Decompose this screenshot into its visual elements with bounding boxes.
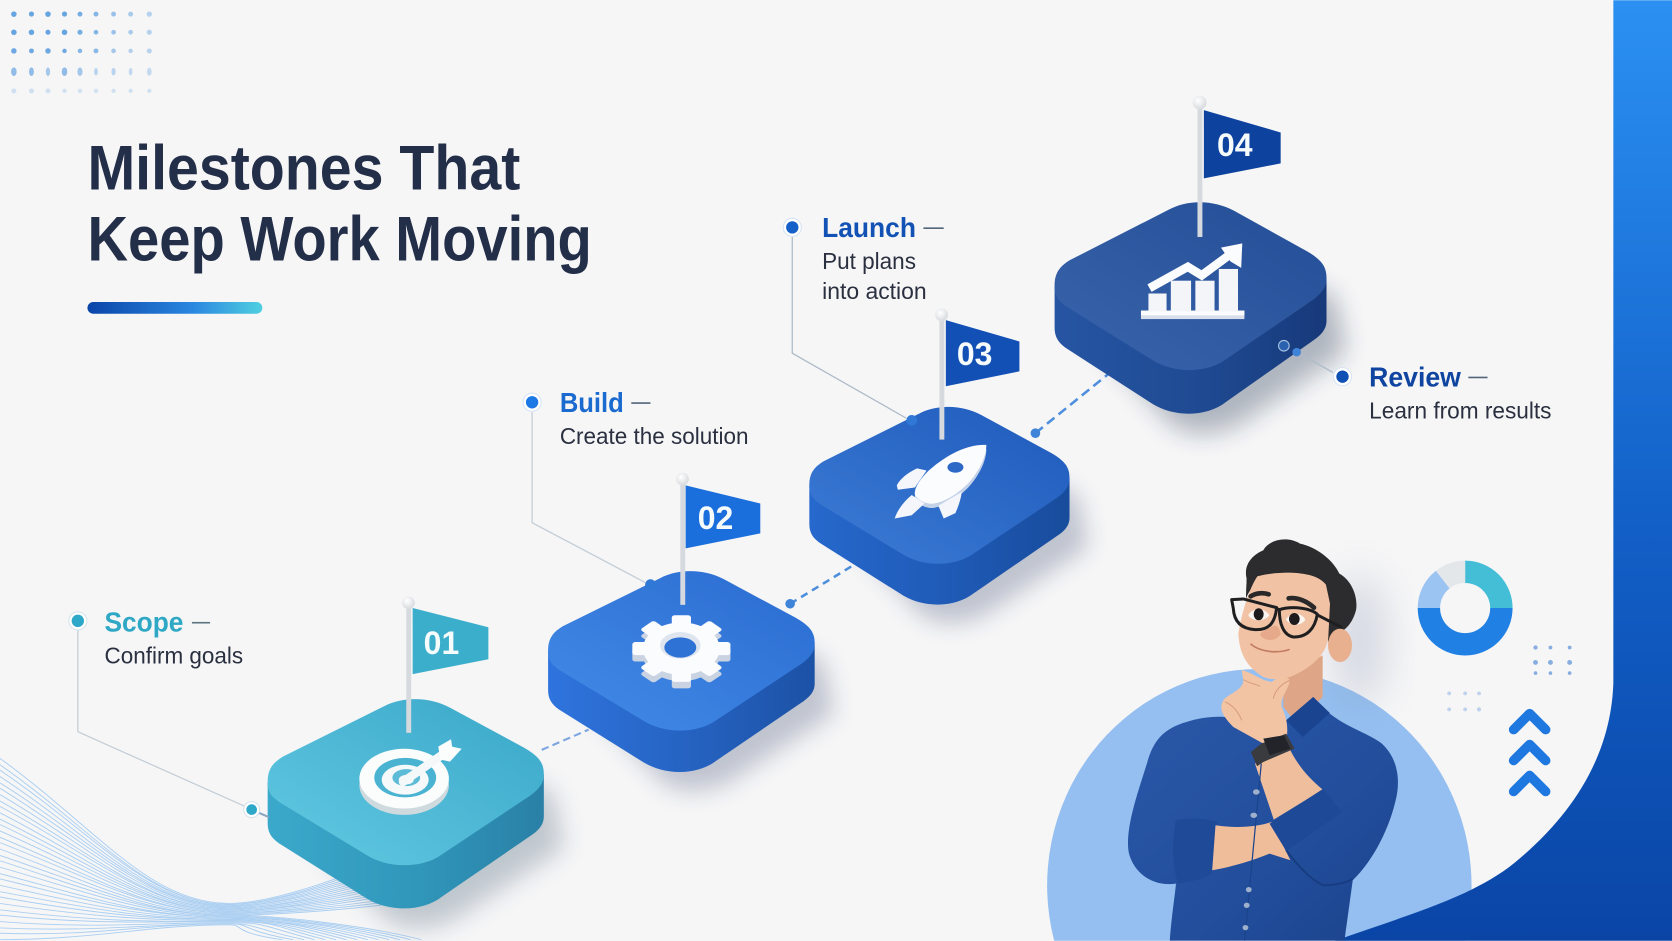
torso and arms bbox=[1128, 697, 1398, 941]
flag 02 bbox=[676, 473, 760, 605]
milestone block 2 bbox=[548, 571, 834, 791]
callout: Review: Learn from results bbox=[1369, 397, 1552, 423]
light blue circle behind person bbox=[1047, 669, 1472, 941]
icon: bar chart with rising arrow bbox=[1141, 243, 1244, 319]
left cuff bbox=[1173, 818, 1218, 884]
eyes bbox=[1254, 608, 1300, 625]
hand under chin bbox=[1221, 670, 1290, 744]
decorative dot grid top left bbox=[11, 11, 152, 93]
glasses bbox=[1232, 599, 1342, 637]
flag 04 bbox=[1193, 96, 1281, 237]
callout: Launch: Put plans bbox=[822, 248, 916, 274]
hair fringe bbox=[1246, 557, 1339, 599]
flag 04: 04 bbox=[1217, 127, 1253, 163]
callout: Review: Review bbox=[1369, 361, 1461, 392]
milestone block 4 bbox=[1055, 202, 1346, 434]
eyebrows bbox=[1251, 593, 1314, 608]
dashed connector 2 to 3 bbox=[785, 565, 853, 609]
eye whites bbox=[1248, 610, 1305, 625]
dashed connector 3 to 4 bbox=[1031, 373, 1109, 438]
flag 03: 03 bbox=[957, 336, 992, 372]
person shadow on wall bbox=[1332, 574, 1387, 706]
smile bbox=[1251, 644, 1289, 652]
flag 03 bbox=[935, 308, 1019, 440]
blue corner band bbox=[1335, 0, 1672, 941]
icon: gear bbox=[632, 615, 730, 688]
icon: target with arrow bbox=[359, 739, 462, 815]
collar bbox=[1286, 697, 1330, 737]
callout: Review bbox=[1279, 340, 1552, 423]
callout: Build: Build bbox=[560, 387, 624, 418]
person illustration bbox=[1128, 539, 1398, 941]
face bbox=[1238, 572, 1330, 679]
milestone block 3 bbox=[809, 407, 1088, 623]
callout: Scope: Scope bbox=[105, 607, 183, 638]
finger creases bbox=[1225, 680, 1290, 720]
upward chevrons bbox=[1514, 714, 1546, 791]
dashed connector 1 to 2 bbox=[542, 730, 589, 750]
flag 01 bbox=[402, 596, 488, 733]
flag 01: 01 bbox=[424, 625, 459, 661]
ear bbox=[1328, 629, 1352, 662]
shirt bbox=[1128, 697, 1398, 941]
callout: Launch: into action bbox=[822, 278, 927, 304]
nose bbox=[1260, 625, 1281, 640]
milestone block 1 bbox=[268, 699, 564, 928]
title bbox=[87, 134, 592, 274]
icon: rocket bbox=[895, 445, 986, 518]
hair back bbox=[1246, 539, 1356, 642]
placket and buttons bbox=[1243, 764, 1261, 941]
small dot clusters near donut bbox=[1447, 645, 1572, 711]
title: Milestones That bbox=[87, 134, 520, 204]
neck bbox=[1283, 655, 1323, 724]
flag 02: 02 bbox=[698, 500, 733, 536]
callout: Launch: Launch bbox=[822, 212, 916, 243]
head and hand bbox=[1221, 539, 1356, 744]
wave line pattern bottom left bbox=[0, 758, 421, 940]
watch bbox=[1251, 734, 1295, 766]
title: Keep Work Moving bbox=[87, 204, 592, 274]
donut chart bbox=[1418, 561, 1513, 656]
title underline bbox=[87, 302, 262, 314]
lower forearm bbox=[1212, 822, 1290, 870]
sleeve fold bbox=[1286, 850, 1353, 885]
callout: Scope bbox=[69, 607, 269, 818]
right cuff bbox=[1270, 789, 1342, 851]
callout: Scope: Confirm goals bbox=[105, 643, 243, 669]
callout: Launch bbox=[783, 212, 944, 426]
callout: Build: Create the solution bbox=[560, 423, 749, 449]
callout: Build bbox=[523, 387, 749, 590]
raised forearm bbox=[1255, 750, 1323, 820]
